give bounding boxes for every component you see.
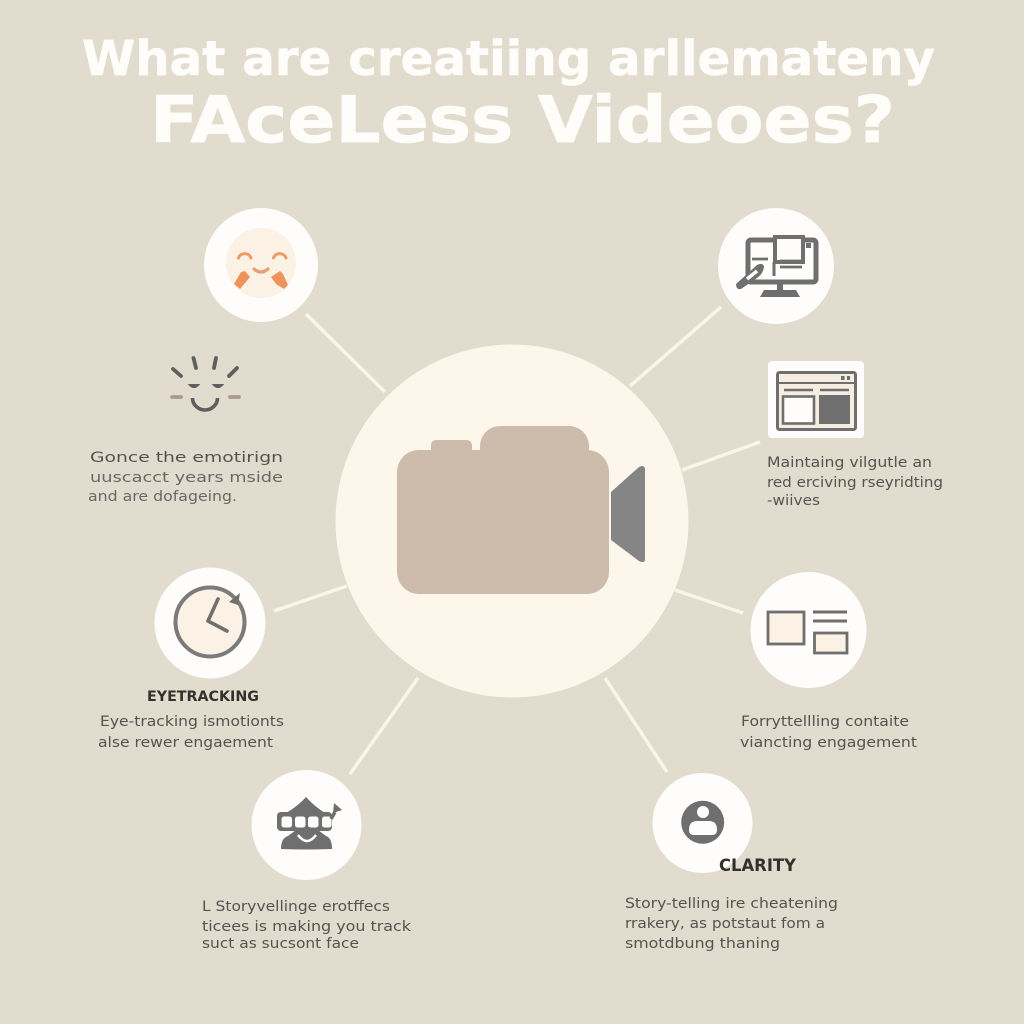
text block: eyetracking: alse rewer engaement <box>98 735 273 751</box>
text block: clarity: rrakery, as potstaut fom a <box>625 916 825 932</box>
panel: top left emotion <box>88 208 318 505</box>
text block: maintaining: -wiives <box>767 493 820 509</box>
icon: small smile with rays <box>172 358 239 410</box>
icon: orange smiling face <box>226 228 296 298</box>
panel: window card <box>767 361 943 509</box>
panel: right layout <box>740 572 917 751</box>
text block: storytelling: ticees is making you track <box>202 919 412 935</box>
panel: bottom left storytelling <box>202 770 412 952</box>
panel: top right editing <box>718 208 834 324</box>
text block: clarity <box>625 896 838 952</box>
text block: maintaining: red erciving rseyridting <box>767 475 943 491</box>
text block: storytelling <box>202 899 412 952</box>
text block: maintaining <box>767 455 943 509</box>
icon: browser window <box>778 372 856 430</box>
icon: video camera <box>397 426 645 594</box>
text block: emotion <box>88 450 283 505</box>
title <box>82 31 935 158</box>
icon: clock <box>176 588 244 656</box>
central circle with camera icon <box>336 344 688 698</box>
heading: clarity: CLARITY <box>719 856 797 875</box>
connector lines <box>274 307 760 774</box>
text block: forryttelling <box>740 714 917 751</box>
text block: maintaining: Maintaing vilgutle an <box>767 455 932 471</box>
icon: monitor with pen <box>736 237 816 297</box>
text block: forryttelling: Forryttellling contaite <box>741 714 909 730</box>
heading: eyetracking: EYETRACKING <box>147 689 259 705</box>
text block: eyetracking: Eye-tracking ismotionts <box>100 714 284 730</box>
text block: storytelling: suct as sucsont face <box>202 936 359 952</box>
title: What are creatiing arllemateny <box>82 31 935 87</box>
text block: storytelling: L Storyvellinge erotffecs <box>202 899 390 915</box>
text block: emotion: uuscacct years mside <box>90 470 283 486</box>
text block: forryttelling: viancting engagement <box>740 735 917 751</box>
text block: clarity: Story-telling ire cheatening <box>625 896 838 912</box>
icon: person badge <box>681 801 724 844</box>
panel: eyetracking <box>98 568 284 751</box>
text block: emotion: Gonce the emotirign <box>90 450 283 466</box>
panel: clarity <box>625 773 838 952</box>
text block: emotion: and are dofageing. <box>88 489 237 505</box>
icon: layout blocks <box>768 612 847 653</box>
title: FAceLess Videoes? <box>150 83 895 158</box>
icon: helmet figure <box>277 797 342 850</box>
text block: clarity: smotdbung thaning <box>625 936 780 952</box>
text block: eyetracking <box>98 714 284 751</box>
